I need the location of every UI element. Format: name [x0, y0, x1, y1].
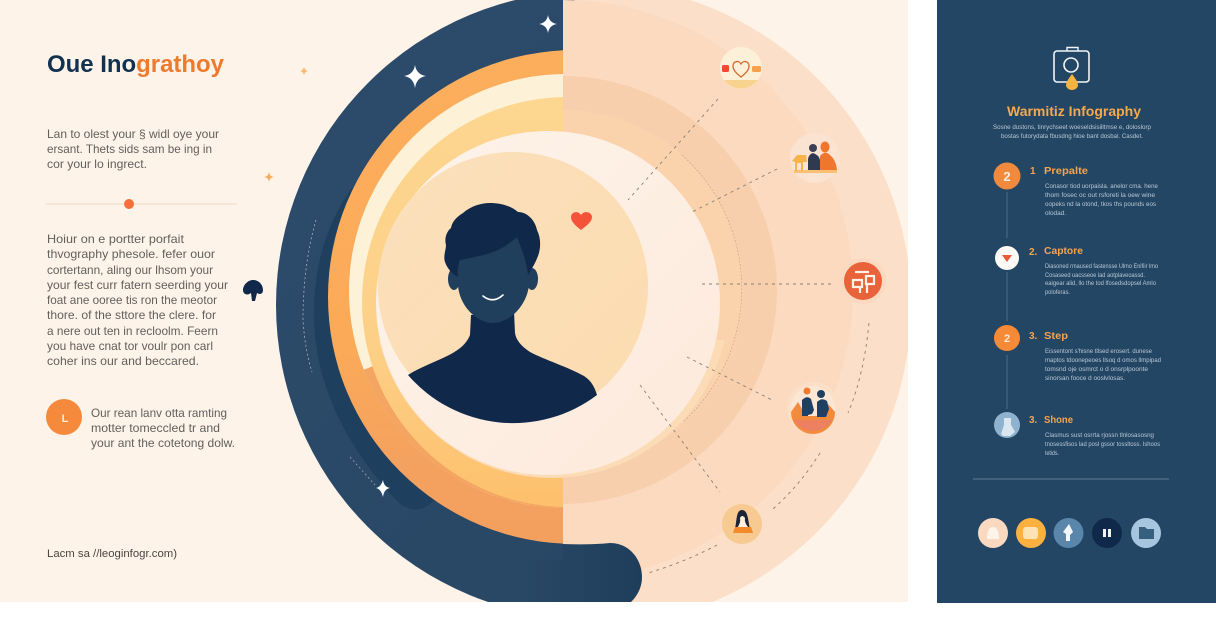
badge disc	[720, 47, 762, 89]
thin dashed inner arc	[682, 155, 742, 422]
callout	[46, 399, 235, 450]
icon: heart	[571, 212, 592, 230]
darker navy crescent	[314, 188, 434, 510]
icon: navy pause	[1092, 518, 1122, 548]
body paragraph: you have cnat tor voulr pon carl	[47, 339, 213, 353]
sidebar subtitle	[993, 124, 1151, 140]
sidebar subtitle: bostas futorydata fbusdng hioe bant dosbal. Casdet.	[1001, 133, 1143, 140]
lower orange ring segment	[364, 366, 563, 508]
table	[792, 155, 807, 171]
body paragraph: foat ane ooree tis ron the meotor	[47, 293, 217, 307]
yellow ring	[362, 97, 563, 507]
white dashed arc upper	[303, 220, 316, 372]
right ear	[528, 268, 538, 290]
step 2 body	[1045, 263, 1158, 296]
callout text: your ant the cotetong dolw.	[91, 436, 235, 450]
step 3	[994, 325, 1161, 382]
step connector 1	[1006, 192, 1008, 238]
halo	[787, 382, 839, 434]
shoulders and neck	[408, 312, 597, 423]
inner peach band	[383, 110, 743, 470]
orange ring	[328, 50, 563, 544]
sparkle: bottom	[376, 480, 390, 497]
right body	[817, 399, 829, 417]
sidebar title: Warmitiz Infography	[1007, 103, 1141, 119]
step 4 number: 3.	[1029, 415, 1038, 426]
face	[458, 237, 528, 323]
smile	[483, 295, 503, 300]
halo	[840, 258, 886, 304]
step 1 body: oopeks nd la otond, tkos ths pounds eos	[1045, 201, 1156, 208]
icon: blue figure	[1054, 518, 1084, 548]
sparkle: top	[539, 15, 557, 33]
badge disc	[791, 386, 835, 430]
right head	[817, 390, 825, 398]
left ear	[448, 270, 458, 290]
step 3 number: 3.	[1029, 331, 1038, 342]
ground band	[794, 420, 832, 431]
step 2 badge	[995, 246, 1019, 270]
title: Oue Inograthoy	[47, 51, 225, 78]
callout text	[91, 406, 235, 450]
step 3 body: maptos tdoonepeoes llsoq d omos llmpipad	[1045, 357, 1161, 364]
step 4 title: Shone	[1044, 415, 1073, 426]
sparkle: orange lower	[264, 172, 274, 182]
step 1 body: olodad.	[1045, 210, 1066, 217]
sidebar divider	[973, 478, 1169, 480]
badge disc	[722, 504, 762, 544]
heart outline	[733, 62, 749, 77]
icon: person badge	[722, 504, 762, 544]
icon: yellow chat	[1016, 518, 1046, 548]
intro text: cor your lo ingrect.	[47, 157, 147, 171]
step 1 badge number: 2	[1003, 169, 1011, 184]
callout badge letter: L	[62, 413, 69, 425]
red tab	[722, 65, 729, 72]
peach right half	[563, 0, 911, 602]
step 1 title: Prepalte	[1044, 166, 1088, 177]
dashed connectors	[628, 99, 869, 573]
face and shirt	[737, 516, 749, 528]
sparkle: large	[404, 65, 426, 88]
icon row	[978, 518, 1161, 548]
sidebar subtitle: Sosne dustons, tinrychseet woeseldsisilltmse e, doloslorp	[993, 124, 1151, 131]
body paragraph: Hoiur on e portter porfait	[47, 232, 185, 246]
white dashed arc lower	[350, 457, 375, 485]
step 1 badge	[994, 162, 1020, 190]
step connector 3	[1006, 355, 1008, 409]
body paragraph	[47, 232, 228, 368]
body paragraph: coher ins our and beccared.	[47, 354, 199, 368]
intro text	[47, 127, 219, 171]
step 2 title: Captore	[1044, 246, 1083, 257]
step 2 body: Cosaseed uacsseoe lad aotplaveoassd.	[1045, 272, 1145, 279]
panel: steps sidebar	[937, 0, 1216, 603]
lower shadow band	[380, 340, 724, 478]
step 2 body: eaigear alid, llo the tod lfosedsdopsel Amlo	[1045, 280, 1156, 287]
step 3 body: tomsnd oje osmrct o d onsrplpoonte	[1045, 366, 1148, 373]
step 1 body: Conasor tiod uorpaisla. anelor cma. hene	[1045, 183, 1158, 190]
icon: heart badge	[720, 47, 762, 89]
left body	[802, 397, 814, 416]
icon: orange signpost badge	[840, 258, 886, 304]
badge disc	[790, 133, 840, 183]
icon: two people badge	[787, 382, 839, 434]
navy body	[808, 153, 820, 170]
step 3 badge	[994, 325, 1020, 351]
body paragraph: cortertann, aling our lhsom your	[47, 263, 213, 277]
icon: peach person	[978, 518, 1008, 548]
step 3 title: Step	[1044, 331, 1068, 342]
step 2 body: Diasoned rmaused fastensse Ulmo Enifiir lmo	[1045, 263, 1158, 270]
orange tab	[752, 66, 761, 72]
callout text: Our rean lanv otta ramting	[91, 406, 227, 420]
signpost glyph	[853, 272, 874, 293]
step 2 number: 2.	[1029, 247, 1038, 258]
callout text: motter tomeccled tr and	[91, 421, 220, 435]
navy ring tail	[563, 543, 642, 602]
portrait disc	[378, 152, 648, 393]
body paragraph: a nere out ten in recloolm. Feern	[47, 324, 218, 338]
intro text: Lan to olest your § widl oye your	[47, 127, 219, 141]
intro text: ersant. Thets sids sam be ing in	[47, 142, 212, 156]
step 4 badge figure	[1001, 418, 1015, 436]
icon: camera	[1054, 48, 1089, 90]
left page background	[0, 0, 908, 602]
sunset ground	[791, 402, 835, 434]
step 4 body: Clasmus sust osrrta rjossn tlnlosasosng	[1045, 432, 1154, 439]
orange base	[733, 527, 753, 533]
body paragraph: thvography phesole. fefer ouor	[47, 247, 215, 261]
step connector 2	[1006, 272, 1008, 321]
divider with dot	[46, 199, 237, 209]
step 4 badge	[994, 412, 1020, 438]
body paragraph: your fest curr fatern seerding your	[47, 278, 228, 292]
callout badge	[46, 399, 82, 435]
step 2 badge arrow	[1002, 255, 1012, 262]
icon: blue folder	[1131, 518, 1161, 548]
badge base	[724, 80, 758, 89]
left head	[804, 388, 810, 394]
step 1 body	[1045, 183, 1158, 217]
hair	[444, 203, 540, 277]
footer link: Lacm sa //leoginfogr.com)	[47, 548, 177, 560]
faint peach band	[563, 0, 575, 22]
portrait silhouette	[408, 203, 597, 423]
step 2	[995, 246, 1158, 296]
step 4 body: tetids.	[1045, 450, 1059, 457]
central concentric portrait graphic	[273, 0, 911, 619]
step 1 heading: 1	[1030, 166, 1036, 177]
step 4 body	[1045, 432, 1160, 457]
step 1	[994, 162, 1158, 217]
icon: navy spade	[243, 280, 263, 301]
step 3 badge number: 2	[1004, 333, 1010, 345]
darker peach band	[563, 76, 777, 504]
base strip	[794, 170, 837, 173]
step 3 body	[1045, 348, 1161, 382]
step 3 body: Eissentont s'hisne tllsed erosert. dunese	[1045, 348, 1152, 355]
hair	[735, 510, 750, 529]
navy head	[809, 144, 817, 152]
icon: couple badge	[790, 133, 840, 183]
orange head	[820, 142, 830, 152]
sidebar background	[937, 0, 1216, 603]
sparkle: orange upper	[300, 67, 308, 75]
step 1 body: thom fosec oc out rsforeti la oew wine	[1045, 192, 1155, 199]
outer navy ring	[276, 0, 575, 602]
light inner disc	[376, 131, 720, 475]
step 4 body: tnosessfisos lad posl gssor tossltoss. Ishoos	[1045, 441, 1160, 448]
step 2 body: poloferas.	[1045, 289, 1070, 296]
step 4	[994, 412, 1160, 457]
badge disc	[844, 262, 882, 300]
orange body	[820, 153, 837, 170]
body paragraph: thore. of the sttore the clere. for	[47, 308, 216, 322]
step 3 body: sinorsan fooce d ooslvlosas.	[1045, 375, 1125, 382]
cream ring	[349, 74, 563, 508]
